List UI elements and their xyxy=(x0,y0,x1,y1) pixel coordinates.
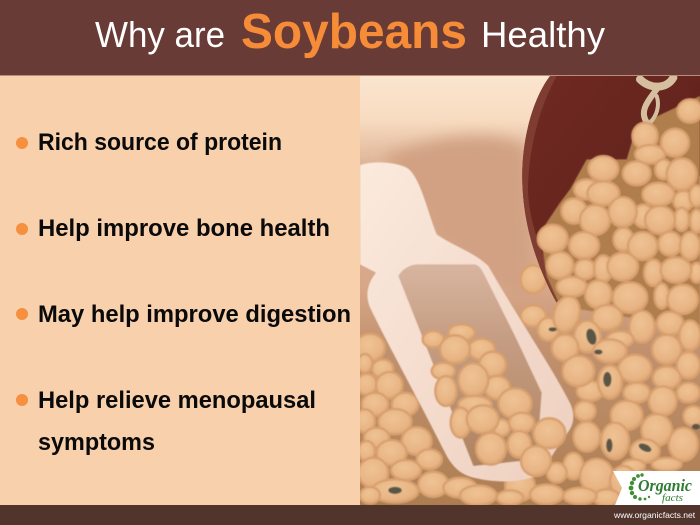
website url: www.organicfacts.net xyxy=(614,510,695,520)
icon: leaf arc xyxy=(629,473,650,501)
benefit: digestion: May help improve digestion xyxy=(38,301,351,328)
header bar xyxy=(0,0,700,76)
beans spilling from bowl xyxy=(460,99,700,506)
footer bar xyxy=(0,505,700,525)
benefit: menopausal symptoms xyxy=(16,387,316,456)
benefit: protein: Rich source of protein xyxy=(38,129,282,156)
panel: health benefits list xyxy=(0,76,360,505)
beans in scoop xyxy=(423,324,565,476)
title: Why are xyxy=(95,14,225,55)
logo wordmark: Organic xyxy=(638,476,692,495)
logo wordmark: facts xyxy=(662,493,683,504)
logo wordmark xyxy=(638,476,692,504)
wooden scoop xyxy=(360,162,573,481)
title: Soybeans xyxy=(241,5,467,59)
photo: soybeans, wooden scoop and bowl xyxy=(360,76,700,505)
logo: Organic Facts flag xyxy=(613,471,700,505)
benefit: menopausal symptoms: Help relieve menopausal xyxy=(38,387,316,414)
bean hilum marks xyxy=(388,327,700,494)
photo background: sand and soy flour xyxy=(360,76,700,506)
benefit: bone health: Help improve bone health xyxy=(38,215,330,242)
benefit: menopausal symptoms: symptoms xyxy=(38,429,155,456)
rope on bowl xyxy=(640,78,673,124)
background beans, left pile xyxy=(355,265,546,504)
title xyxy=(95,5,605,59)
title: Healthy xyxy=(481,14,605,55)
wooden bowl xyxy=(522,76,700,329)
